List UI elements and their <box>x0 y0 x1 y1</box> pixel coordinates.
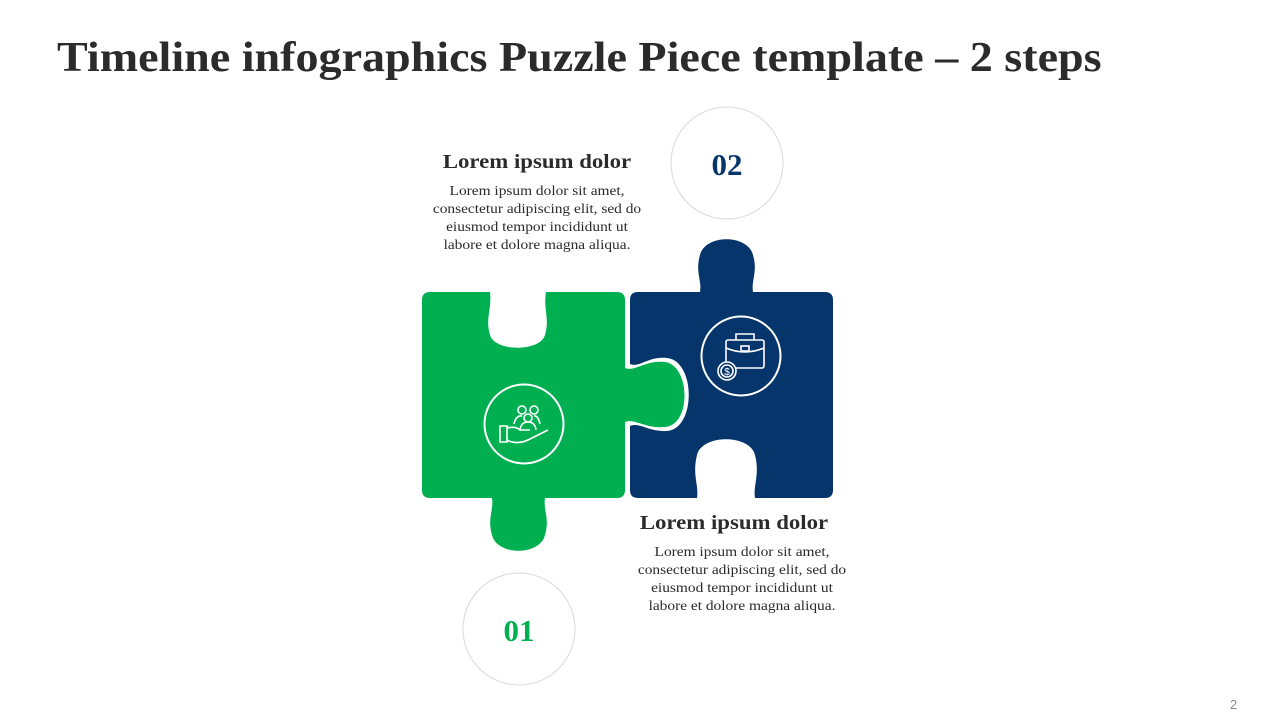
icon: briefcase with coin <box>702 316 780 396</box>
text block: step 01: consectetur adipiscing elit, sed do <box>638 563 846 578</box>
puzzle piece: green <box>422 292 685 551</box>
puzzle piece: blue <box>630 239 833 498</box>
text block: step 01 <box>638 512 846 614</box>
text block: step 02: labore et dolore magna aliqua. <box>444 238 630 253</box>
title: Timeline infographics Puzzle Piece template – 2 steps <box>57 35 1102 81</box>
text block: step 02: Lorem ipsum dolor <box>443 151 631 173</box>
text block: step 01: Lorem ipsum dolor sit amet, <box>655 545 829 560</box>
number circle 02: 02 <box>712 147 742 182</box>
number circle 02 <box>671 107 783 219</box>
text block: step 02: Lorem ipsum dolor sit amet, <box>450 184 624 199</box>
page number: 2 <box>1230 697 1237 712</box>
icon: hand with people <box>484 384 564 464</box>
text block: step 01: labore et dolore magna aliqua. <box>649 599 835 614</box>
icon: briefcase with coin: $ <box>724 367 730 378</box>
text block: step 02 <box>433 151 641 253</box>
text block: step 02: eiusmod tempor incididunt ut <box>446 220 628 235</box>
text block: step 01: Lorem ipsum dolor <box>640 512 828 534</box>
text block: step 02: consectetur adipiscing elit, sed do <box>433 202 641 217</box>
text block: step 01: eiusmod tempor incididunt ut <box>651 581 833 596</box>
number circle 01 <box>463 573 575 685</box>
number circle 01: 01 <box>504 613 534 648</box>
